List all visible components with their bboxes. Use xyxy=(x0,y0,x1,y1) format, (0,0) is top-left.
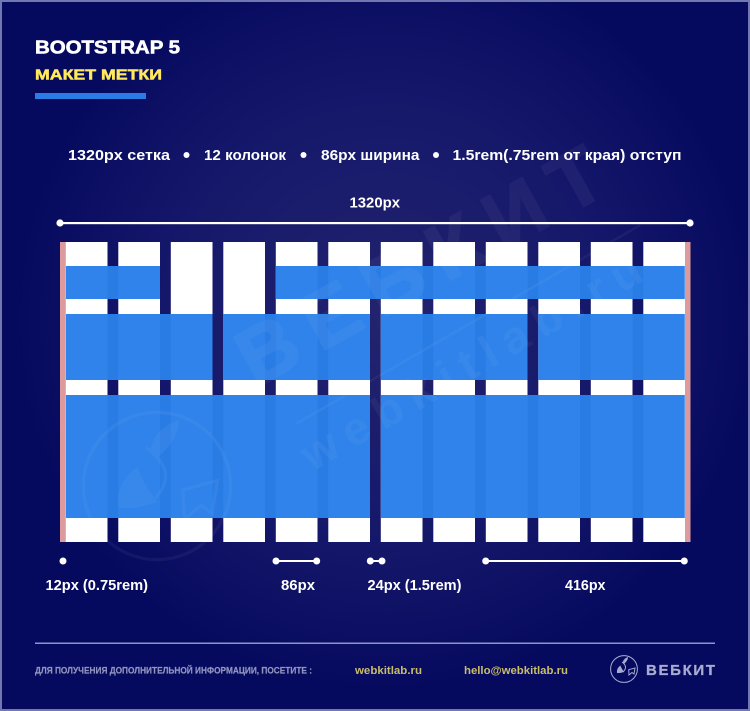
summary line: 1.5rem(.75rem от края) отступ xyxy=(452,148,682,164)
watermark: ВЕБКИТ xyxy=(221,129,619,403)
container width dimension xyxy=(56,196,694,227)
summary line: 12 колонок xyxy=(204,148,287,164)
footer note: ДЛЯ ПОЛУЧЕНИЯ ДОПОЛНИТЕЛЬНОЙ ИНФОРМАЦИИ, ПОСЕТИТЕ : xyxy=(35,664,312,676)
subheading: layout label: МАКЕТ МЕТКИ xyxy=(35,66,162,84)
container margins xyxy=(60,242,690,542)
title block xyxy=(35,38,180,99)
bottom dimensions xyxy=(46,558,688,594)
watermark xyxy=(83,129,650,560)
gutter marker: 24px (1.5rem) xyxy=(368,578,462,594)
logo wordmark: ВЕБКИТ xyxy=(646,662,715,679)
span width marker xyxy=(482,558,688,594)
twelve white columns xyxy=(66,242,685,542)
website link: webkitlab.ru xyxy=(354,665,422,677)
span width marker: 416px xyxy=(565,578,606,594)
gutter marker xyxy=(367,558,462,594)
email link: hello@webkitlab.ru xyxy=(464,665,568,677)
heading: Bootstrap 5: BOOTSTRAP 5 xyxy=(35,38,180,58)
watermark: webkitlab.ru xyxy=(290,243,650,481)
row 1: blue bands xyxy=(66,266,685,299)
dimension label: 1320px xyxy=(350,196,400,212)
logo icon xyxy=(611,656,637,682)
grid diagram xyxy=(60,242,690,542)
watermark logo xyxy=(83,412,231,560)
row 2: blue bands xyxy=(66,314,685,380)
accent bar xyxy=(35,93,146,99)
summary line xyxy=(68,148,682,164)
margin marker: 12px (0.75rem) xyxy=(46,578,148,594)
row 3: blue bands xyxy=(66,395,685,518)
summary line: 86px ширина xyxy=(321,148,420,164)
summary line: 1320px сетка xyxy=(68,148,171,164)
column width marker: 86px xyxy=(281,578,315,594)
footer xyxy=(35,642,715,682)
column width marker xyxy=(272,558,320,594)
margin marker xyxy=(46,558,148,594)
